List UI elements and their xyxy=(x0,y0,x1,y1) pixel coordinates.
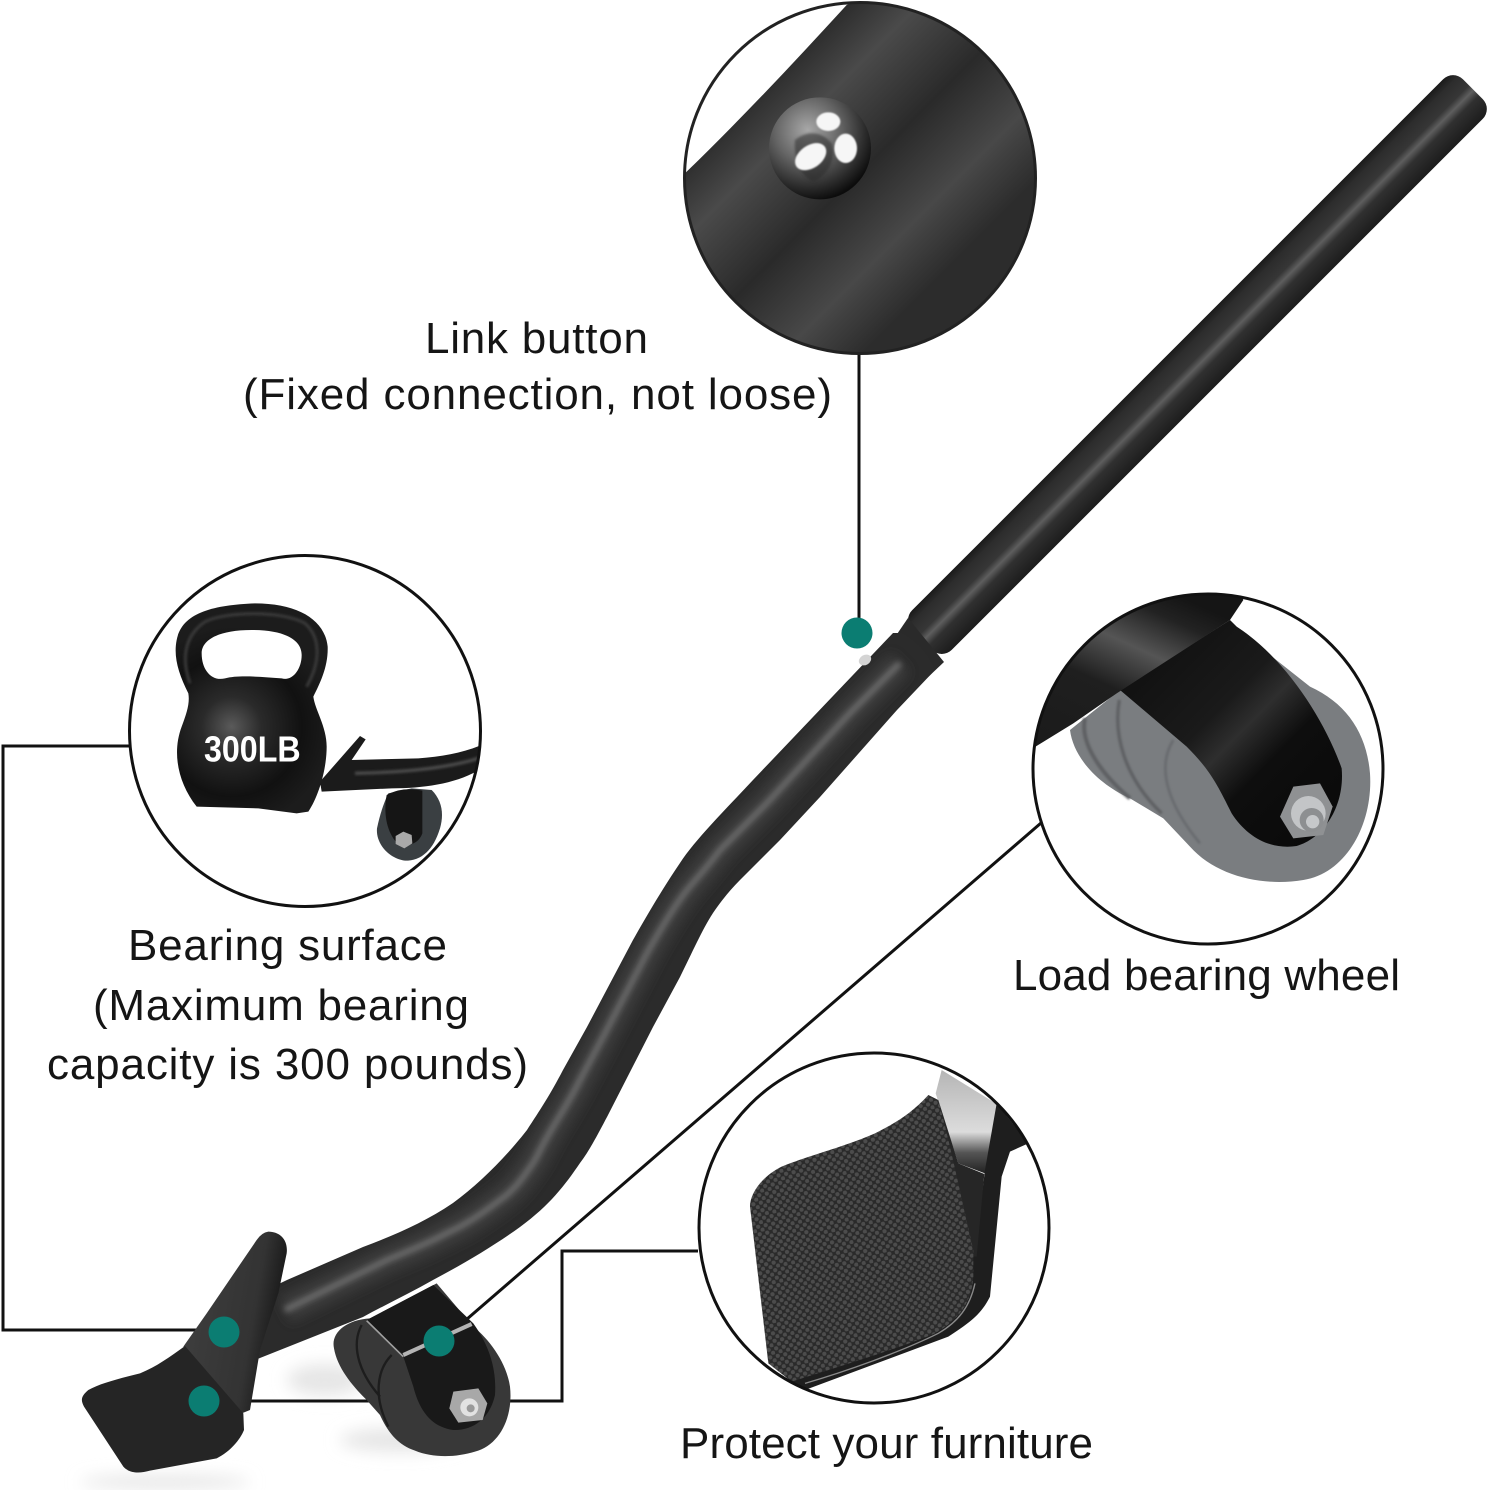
base: bearing plate and rubber pad xyxy=(82,1232,287,1473)
lifter bar lower tube xyxy=(250,633,935,1362)
text: link button: Link button xyxy=(425,314,648,363)
text: bearing surface: Bearing surface xyxy=(128,921,447,970)
callout dot: load wheel xyxy=(424,1326,454,1356)
text: load bearing wheel: Load bearing wheel xyxy=(1013,951,1400,1000)
text: bearing surface: capacity is 300 pounds) xyxy=(47,1040,528,1089)
load wheel on base xyxy=(334,1283,511,1456)
bearing plate xyxy=(183,1232,287,1413)
wheel bracket xyxy=(1120,620,1342,847)
panel: load bearing wheel detail xyxy=(1030,587,1383,944)
small wheel xyxy=(377,788,442,861)
text: bearing surface xyxy=(47,921,528,1089)
callout dot: bearing surface xyxy=(208,1316,240,1348)
knurled rubber pad xyxy=(750,1095,973,1382)
floor shadows xyxy=(80,1364,460,1489)
panel: bearing surface detail xyxy=(130,556,482,906)
pad fold shadow xyxy=(938,1100,984,1257)
axle nut xyxy=(1280,783,1333,838)
panel: link button detail xyxy=(680,0,1040,360)
tube surface xyxy=(680,0,1040,360)
text: bearing surface: (Maximum bearing xyxy=(93,981,469,1030)
text: link button xyxy=(243,314,832,419)
tube above wheel xyxy=(1036,596,1244,746)
kettlebell xyxy=(176,603,328,813)
bar in detail xyxy=(320,736,482,792)
panel: furniture protection pad detail xyxy=(699,1053,1049,1403)
glossy plate xyxy=(936,1070,998,1173)
dark bracket xyxy=(785,1103,1028,1390)
weight label: 300LB xyxy=(204,729,301,770)
grey wheel xyxy=(1070,658,1370,882)
callout dot: pad xyxy=(188,1386,220,1416)
text: protect your furniture: Protect your furniture xyxy=(680,1419,1093,1468)
text: link button: (Fixed connection, not loose) xyxy=(243,370,832,419)
steel ball xyxy=(769,97,871,199)
callout lines xyxy=(3,353,1041,1401)
link button on bar xyxy=(857,652,873,668)
rubber pad xyxy=(82,1346,244,1473)
lifter bar upper tube xyxy=(893,69,1490,680)
callout dot: link button xyxy=(842,618,872,648)
